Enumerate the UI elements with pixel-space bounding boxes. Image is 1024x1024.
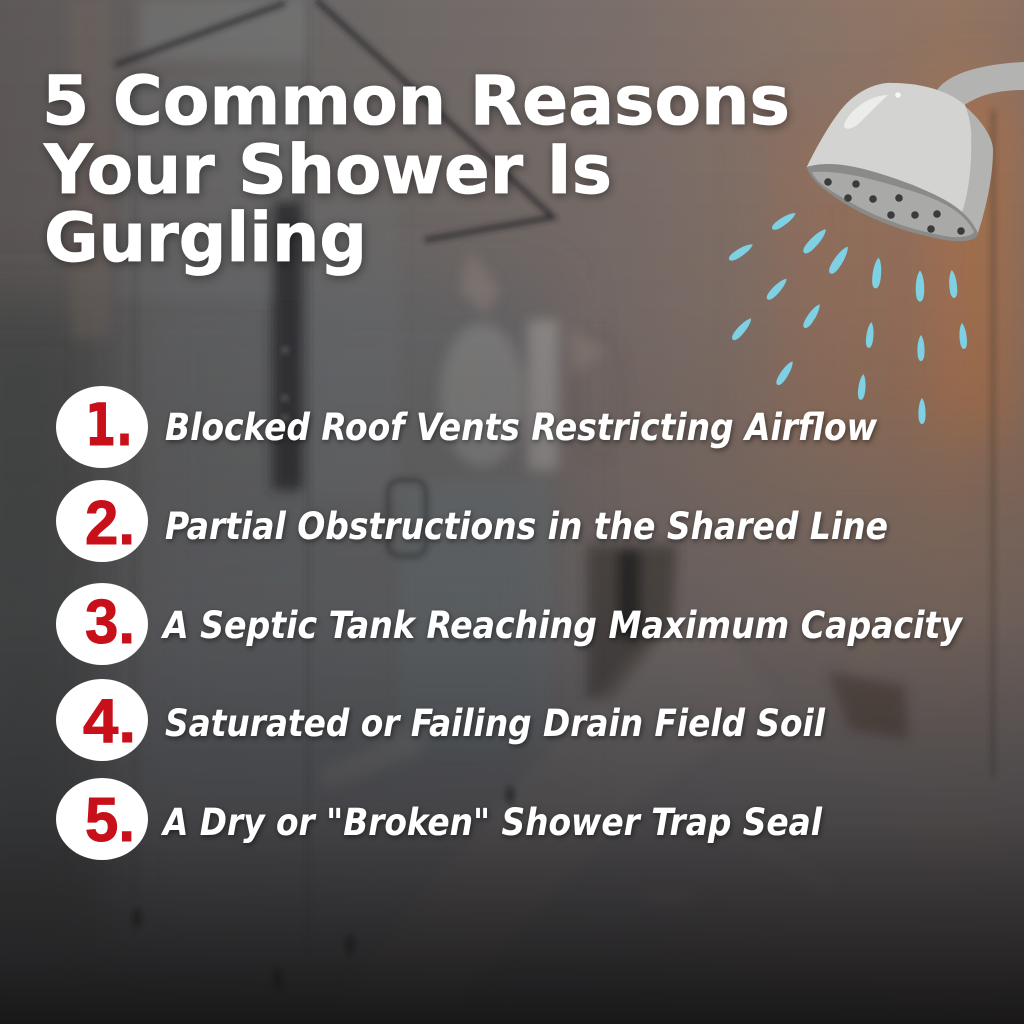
reason 4: 4. <box>83 687 136 756</box>
reason 5 <box>56 778 823 860</box>
shower head dome <box>807 83 971 212</box>
dome highlight <box>844 95 888 129</box>
list of reasons <box>56 386 963 860</box>
title: Your Shower Is <box>43 131 612 210</box>
reason 2 <box>56 480 888 562</box>
icon: shower head with water drops <box>727 62 1024 424</box>
title <box>42 62 790 278</box>
reason 4: Saturated or Failing Drain Field Soil <box>165 702 826 745</box>
title: 5 Common Reasons <box>42 62 790 141</box>
reason 3: A Septic Tank Reaching Maximum Capacity <box>160 604 963 647</box>
reason 2: Partial Obstructions in the Shared Line <box>165 505 888 548</box>
water drops <box>727 210 968 424</box>
reason 1 <box>56 386 877 468</box>
reason 3 <box>56 583 963 665</box>
reason 5: 5. <box>85 786 135 855</box>
reason 1: Blocked Roof Vents Restricting Airflow <box>165 406 877 449</box>
nozzle holes <box>824 178 965 235</box>
shower pipe <box>937 62 1024 106</box>
reason 4 <box>56 679 826 761</box>
reason 1: 1. <box>85 391 133 459</box>
title: Gurgling <box>44 199 367 278</box>
shower head face <box>807 164 978 241</box>
reason 5: A Dry or "Broken" Shower Trap Seal <box>160 801 823 844</box>
reason 2: 2. <box>85 489 135 558</box>
reason 3: 3. <box>85 588 135 657</box>
shower head side shading <box>955 102 993 233</box>
